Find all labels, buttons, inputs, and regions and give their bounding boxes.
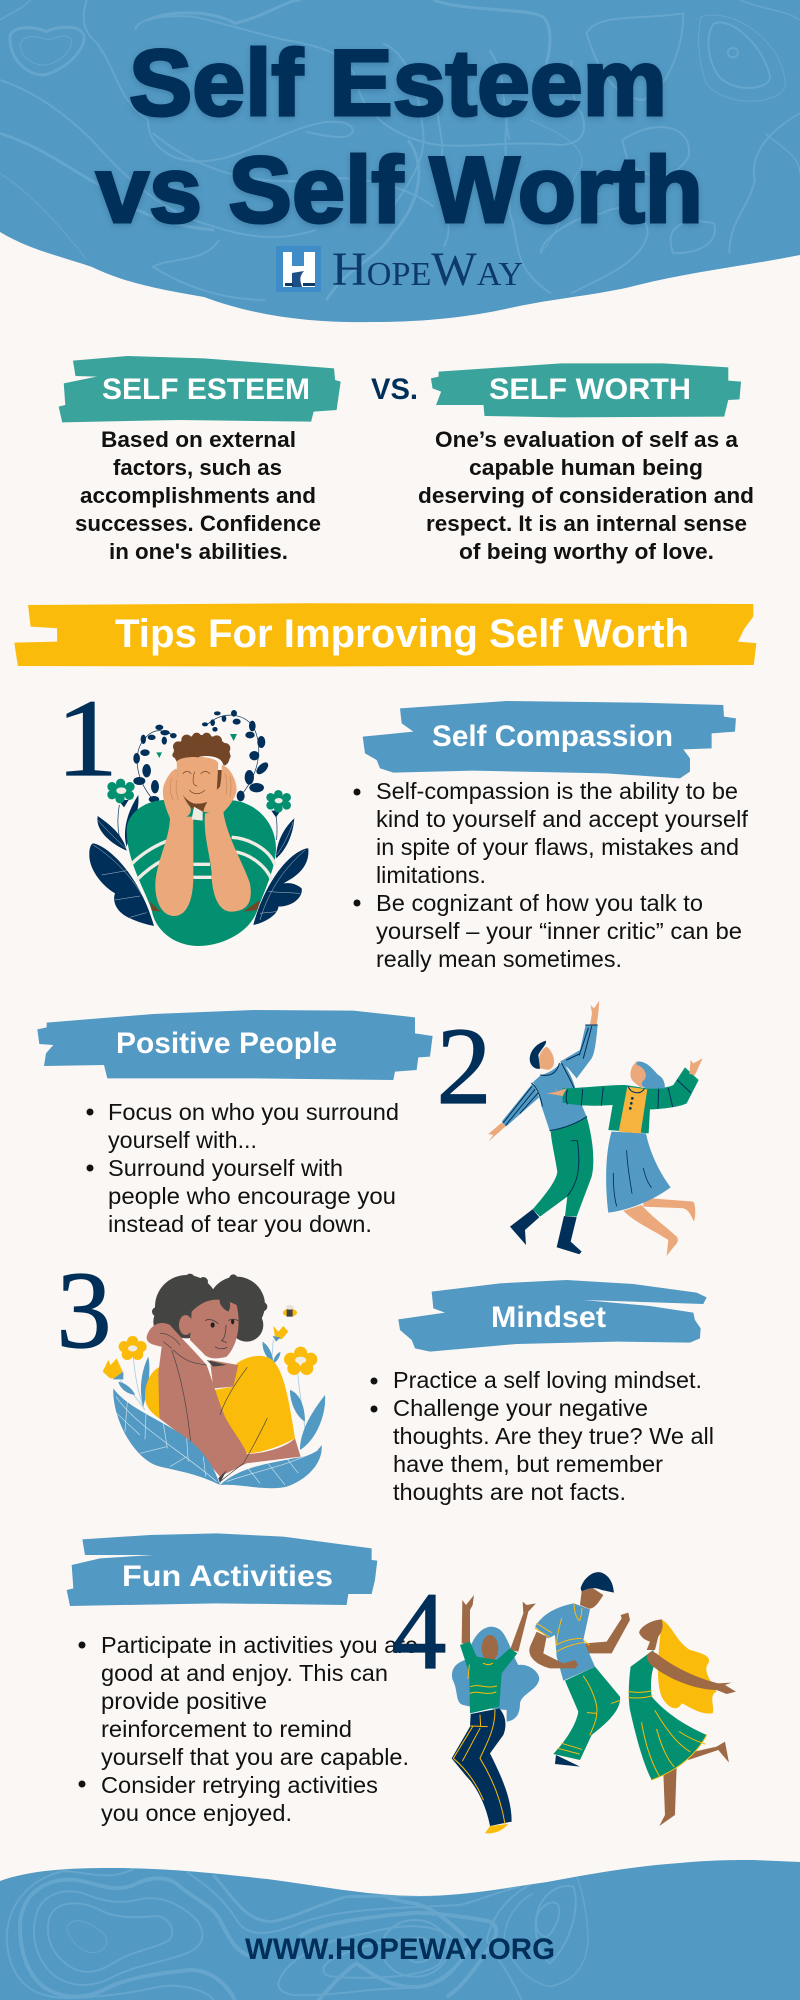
illustration: three people dancing [452, 1572, 736, 1833]
bullet list: fun activities: reinforcement to remind [101, 1716, 352, 1742]
number 2: 2 [436, 1005, 492, 1127]
bullet list: fun activities: good at and enjoy. This can [101, 1660, 388, 1686]
bullet list: mindset: Practice a self loving mindset. [393, 1367, 702, 1393]
man's boots [510, 1209, 582, 1254]
tip 4: fun activities [67, 1533, 418, 1826]
neck and collar [177, 770, 225, 812]
bullet list: mindset [370, 1367, 714, 1505]
brush heading: self worth [431, 363, 741, 417]
woman's upper body [547, 1058, 703, 1213]
illustration: dancing couple [488, 1001, 703, 1256]
header banner [0, 0, 800, 322]
panel: self esteem [59, 356, 341, 564]
leaves [113, 1388, 322, 1488]
self esteem definition [75, 427, 321, 564]
brush heading: mindset [398, 1280, 707, 1352]
bullet list: mindset: thoughts are not facts. [393, 1479, 626, 1505]
bullet list: positive people [86, 1099, 399, 1237]
number 4: 4 [392, 1570, 446, 1692]
flowers and bee [103, 1305, 317, 1379]
bullet list: positive people: instead of tear you down. [108, 1211, 372, 1237]
right dancer [628, 1619, 736, 1826]
illustration: smiling man with hands on cheeks [89, 710, 308, 946]
foliage [89, 795, 308, 926]
self esteem definition: in one's abilities. [109, 539, 288, 564]
hands [163, 765, 237, 818]
bullet list: self compassion: yourself – your “inner critic” can be [376, 918, 742, 944]
arms [155, 812, 251, 916]
brush heading: self esteem: SELF ESTEEM [102, 373, 310, 406]
bullet list: positive people: Surround yourself with [108, 1155, 343, 1181]
title: vs Self Worth [96, 137, 703, 242]
title: Self Esteem [129, 30, 667, 135]
self worth definition [418, 427, 754, 564]
vs label: VS. [371, 373, 418, 406]
self worth definition: respect. It is an internal sense [426, 511, 747, 536]
tip 1: self compassion [354, 701, 749, 972]
self esteem definition: factors, such as [113, 455, 282, 480]
self worth definition: One’s evaluation of self as a [435, 427, 739, 452]
self esteem definition: Based on external [101, 427, 296, 452]
hair [172, 733, 231, 765]
illustration: woman with curly hair among flowers [103, 1274, 325, 1488]
bullet list: self compassion [354, 778, 749, 972]
face [179, 1293, 239, 1358]
brush heading: positive people [37, 1010, 433, 1080]
shirt stripes [131, 837, 275, 880]
bullet list: fun activities: you once enjoyed. [101, 1800, 292, 1826]
brush heading: self compassion [363, 701, 736, 778]
bullet list: positive people: Focus on who you surround [108, 1099, 399, 1125]
arms [147, 1323, 301, 1477]
hair [152, 1274, 267, 1342]
bullet list: self compassion: kind to yourself and accept yourself [376, 806, 749, 832]
number 3: 3 [56, 1249, 112, 1371]
flower stems and small leaves [118, 1340, 325, 1450]
bullet list: fun activities [78, 1632, 418, 1826]
bullet list: self compassion: limitations. [376, 862, 486, 888]
brush heading: fun activities [67, 1533, 377, 1606]
woman's legs [623, 1198, 695, 1256]
title [96, 30, 703, 242]
tip 2: positive people [37, 1010, 433, 1237]
self worth definition: capable human being [469, 455, 703, 480]
chest [210, 1360, 238, 1388]
website url: WWW.HOPEWAY.ORG [245, 1933, 555, 1966]
bullet list: mindset: thoughts. Are they true? We all [393, 1423, 714, 1449]
self worth definition: deserving of consideration and [418, 483, 754, 508]
bullet list: fun activities: yourself that you are capable. [101, 1744, 409, 1770]
number 1: 1 [56, 677, 118, 799]
wreath [133, 710, 270, 803]
self worth definition: of being worthy of love. [459, 539, 714, 564]
left dancer [452, 1595, 539, 1833]
tip 3: mindset [370, 1280, 714, 1505]
bullet list: self compassion: Be cognizant of how you talk to [376, 890, 703, 916]
self esteem definition: successes. Confidence [75, 511, 321, 536]
brush heading: fun activities: Fun Activities [122, 1560, 333, 1593]
panel: self worth [418, 363, 754, 564]
bullet list: fun activities: Consider retrying activities [101, 1772, 378, 1798]
brush heading: self worth: SELF WORTH [489, 373, 691, 406]
bullet list: self compassion: Self-compassion is the ability to be [376, 778, 738, 804]
brush heading: self esteem [59, 356, 341, 422]
bullet list: mindset: Challenge your negative [393, 1395, 648, 1421]
bullet list: fun activities: Participate in activities you are [101, 1632, 418, 1658]
bullet list: positive people: people who encourage you [108, 1183, 396, 1209]
bullet list: fun activities: provide positive [101, 1688, 267, 1714]
man's upper body [488, 1001, 599, 1142]
hearts [156, 734, 237, 758]
man's trousers [533, 1117, 593, 1217]
bullet list: mindset: have them, but remember [393, 1451, 663, 1477]
yellow sleeves and shirt [145, 1356, 295, 1453]
flowers [107, 779, 291, 840]
brush heading: positive people: Positive People [116, 1027, 337, 1060]
footer banner [0, 1860, 800, 2000]
bullet list: self compassion: really mean sometimes. [376, 946, 622, 972]
face [177, 757, 218, 804]
middle dancer [529, 1572, 630, 1767]
brush heading: self compassion: Self Compassion [432, 720, 673, 753]
bullet list: self compassion: in spite of your flaws, mistakes and [376, 834, 739, 860]
bullet list: positive people: yourself with... [108, 1127, 257, 1153]
self esteem definition: accomplishments and [80, 483, 316, 508]
brush heading: mindset: Mindset [491, 1301, 606, 1334]
tips heading banner [14, 603, 756, 667]
tips heading banner: Tips For Improving Self Worth [115, 612, 689, 656]
HopeWay logo: HOPEWAY [332, 243, 523, 296]
body [127, 800, 276, 946]
